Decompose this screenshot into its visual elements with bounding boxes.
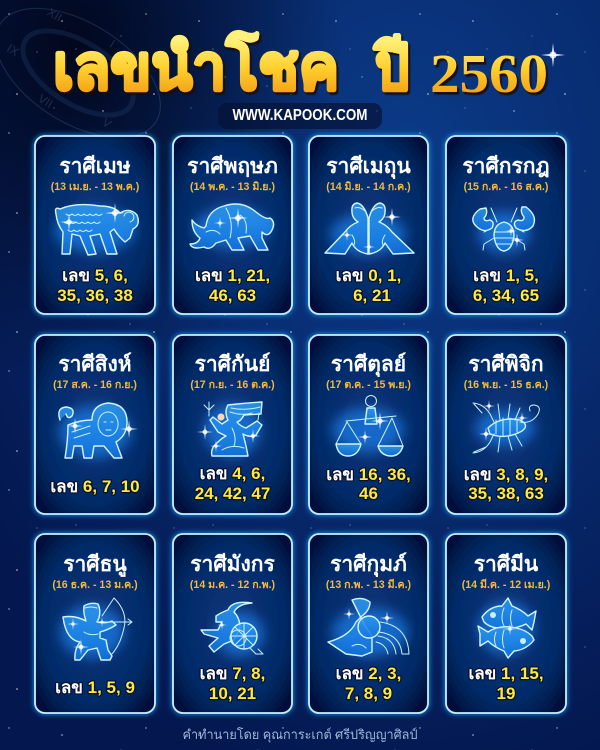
zodiac clock wheel: I: [107, 37, 118, 51]
zodiac clock wheel: VII: [36, 91, 55, 111]
panel: Pisces: (14 มี.ค. - 12 เม.ย.): [462, 578, 550, 591]
panel: Gemini: 6, 21: [353, 286, 391, 305]
panel: Sagittarius: [35, 534, 155, 713]
title: เลขนำโชค: [53, 30, 339, 103]
title: 2560: [430, 43, 548, 104]
panel: Sagittarius: ราศีธนู: [63, 552, 127, 578]
icon: scales: [332, 396, 404, 456]
panel: Taurus: [173, 136, 292, 314]
sparkle near title: [541, 43, 565, 67]
panel: Virgo: (17 ก.ย. - 16 ต.ค.): [190, 379, 275, 391]
panel: Scorpio: เลข 3, 8, 9,: [464, 465, 548, 484]
panel: Taurus: (14 พ.ค. - 13 มิ.ย.): [190, 181, 275, 193]
panel: Sagittarius: (16 ธ.ค. - 13 ม.ค.): [52, 579, 138, 591]
panel: Libra: [309, 335, 428, 514]
panel: Pisces: ราศีมีน: [474, 552, 539, 576]
panel: Gemini: (14 มิ.ย. - 14 ก.ค.): [326, 181, 411, 193]
panel: Capricorn: (14 ม.ค. - 12 ก.พ.): [190, 579, 275, 591]
panel: Gemini: [309, 136, 428, 314]
panel: Aries: 35, 36, 38: [57, 286, 133, 305]
panel: Capricorn: 10, 21: [209, 684, 256, 703]
panel: Cancer: (15 ก.ค. - 16 ส.ค.): [464, 181, 548, 193]
panel: Cancer: ราศีกรกฎ: [462, 154, 550, 178]
panel: Aquarius: [309, 534, 428, 713]
panel: Aries: [35, 136, 155, 314]
zodiac clock wheel: XII: [45, 5, 65, 25]
panel: Capricorn: เลข 7, 8,: [200, 664, 265, 683]
icon: archer: [60, 598, 132, 660]
panel: Virgo: 24, 42, 47: [195, 484, 270, 503]
icon: twins: [325, 203, 414, 254]
panel: Scorpio: ราศีพิจิก: [468, 352, 544, 376]
panel: Libra: ราศีตุลย์: [331, 352, 406, 378]
panel: Gemini: เลข 0, 1,: [336, 266, 401, 285]
icon: crab: [473, 207, 534, 252]
zodiac clock wheel: V: [100, 115, 114, 131]
panel: Taurus: 46, 63: [209, 286, 256, 305]
icon: two fish: [478, 598, 536, 658]
panel: Aries: เลข 5, 6,: [62, 266, 128, 285]
panel: Taurus: ราศีพฤษภ: [187, 154, 278, 178]
panel: Aquarius: (13 ก.พ. - 13 มี.ค.): [326, 578, 411, 591]
panel: Aries: (13 เม.ย. - 13 พ.ค.): [51, 181, 139, 193]
zodiac clock wheel: IX: [4, 41, 21, 59]
panel: Libra: (17 ต.ค. - 15 พ.ย.): [326, 379, 411, 391]
icon: sea goat: [201, 602, 264, 656]
panel: Gemini: ราศีเมถุน: [326, 154, 411, 180]
icon: water bearer: [328, 598, 409, 656]
icon: lion: [59, 403, 138, 458]
icon: bull: [190, 204, 274, 250]
title: [53, 30, 548, 104]
title: ปี: [373, 33, 409, 103]
panel: Aquarius: ราศีกุมภ์: [330, 552, 407, 578]
panel: Taurus: เลข 1, 21,: [195, 266, 270, 285]
panel: Sagittarius: เลข 1, 5, 9: [55, 678, 135, 697]
panel: Libra: เลข 16, 36,: [326, 465, 411, 484]
website label: WWW.KAPOOK.COM: [232, 107, 368, 124]
panel: Cancer: เลข 1, 5,: [473, 266, 539, 285]
panel: Aquarius: 7, 8, 9: [345, 684, 392, 703]
panel: Leo: ราศีสิงห์: [58, 352, 132, 376]
footer credit: คำทำนายโดย คุณการะเกต์ ศรีปริญญาศิลป์: [182, 727, 418, 743]
panel: Leo: (17 ส.ค. - 16 ก.ย.): [53, 379, 137, 391]
panel: Virgo: เลข 4, 6,: [200, 464, 265, 483]
panel: Leo: [35, 335, 155, 514]
panel: Capricorn: ราศีมังกร: [190, 552, 275, 576]
panel: Virgo: ราศีกันย์: [195, 352, 270, 376]
icon: maiden: [197, 402, 262, 456]
panel: Pisces: 19: [497, 684, 515, 703]
panel: Scorpio: 35, 38, 63: [468, 484, 544, 503]
panel: Pisces: เลข 1, 15,: [468, 664, 544, 683]
panel: Pisces: [446, 534, 566, 713]
icon: ram: [55, 203, 138, 255]
panel: Cancer: [446, 136, 566, 314]
panel: Cancer: 6, 34, 65: [473, 286, 539, 305]
zodiac clock wheel: [0, 0, 183, 164]
website label: [218, 103, 382, 129]
panel: Capricorn: [173, 534, 292, 713]
panel: Scorpio: (16 พ.ย. - 15 ธ.ค.): [464, 379, 548, 391]
panel: Scorpio: [446, 335, 566, 514]
icon: scorpion: [473, 400, 539, 453]
panel: Aries: ราศีเมษ: [59, 154, 131, 178]
panel: Aquarius: เลข 2, 3,: [336, 664, 401, 683]
panel: Virgo: [173, 335, 292, 514]
panel: Leo: เลข 6, 7, 10: [50, 477, 140, 496]
panel: Libra: 46: [359, 484, 378, 503]
